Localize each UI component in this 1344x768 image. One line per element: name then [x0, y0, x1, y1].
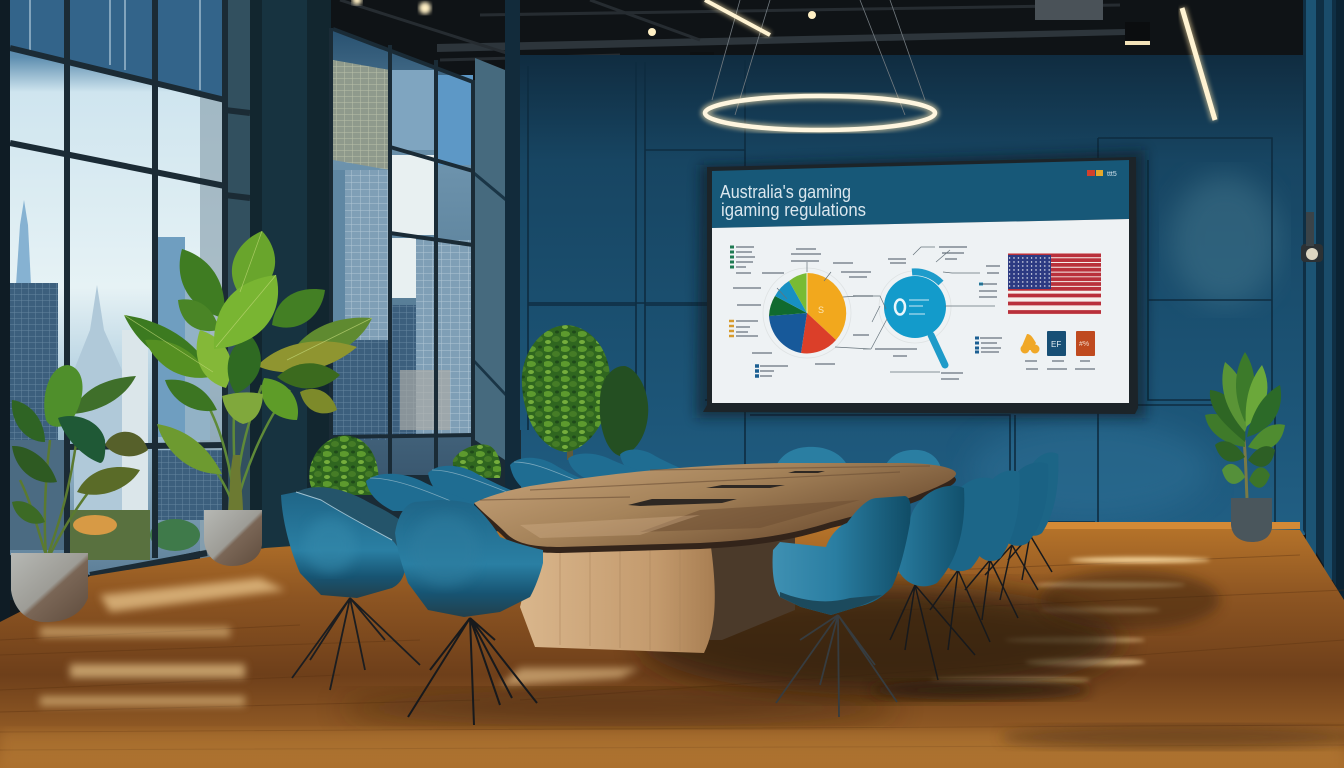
pot: left plant — [11, 553, 88, 622]
wall — [505, 55, 1305, 535]
screen logo — [1087, 170, 1117, 178]
far side chairs — [777, 447, 941, 468]
right row chair 2 — [890, 486, 975, 680]
screen body — [712, 219, 1129, 403]
left chair behind — [297, 487, 403, 560]
icon: navy tile: EF — [1051, 340, 1061, 349]
light fixtures — [352, 0, 1215, 130]
bezel — [703, 157, 1138, 414]
left window — [0, 0, 262, 665]
shrub right — [453, 444, 501, 478]
pie chart — [763, 268, 851, 358]
ceiling — [0, 0, 1344, 110]
right row chair 6 — [1008, 452, 1058, 580]
right window — [331, 0, 521, 540]
table base — [520, 525, 795, 653]
behind-chair highlights — [370, 462, 590, 507]
pie chart: S — [818, 305, 824, 315]
right row chair 4 — [965, 471, 1020, 620]
pot: right plant — [1231, 498, 1272, 542]
magnifier icon — [879, 271, 951, 365]
icon: orange tile — [1076, 331, 1095, 356]
floor — [0, 522, 1344, 768]
city skyline — [10, 200, 225, 560]
screen title — [720, 182, 866, 220]
pot: large plant — [204, 510, 262, 566]
legend squares — [729, 247, 983, 376]
right row chair 5 — [985, 462, 1048, 600]
right columns — [1301, 0, 1344, 600]
back row chairs, left side — [366, 450, 684, 511]
large plant — [124, 231, 372, 512]
screen logo: ttt5 — [1107, 171, 1117, 178]
right plant — [1205, 352, 1285, 498]
center front chair — [395, 500, 543, 725]
right front chair — [773, 496, 911, 717]
american flag — [1008, 253, 1101, 315]
left plant — [12, 365, 148, 555]
table cable ports — [628, 471, 825, 506]
icon: orange figure — [1020, 334, 1040, 354]
screen — [696, 150, 1146, 418]
pillar — [250, 0, 331, 548]
screen title: igaming regulations — [721, 200, 866, 220]
icon: orange tile: #% — [1079, 341, 1089, 348]
right row chair 3 — [930, 478, 995, 650]
shrub left — [309, 436, 379, 495]
left front chair — [281, 492, 420, 690]
small chart labels — [733, 247, 1095, 379]
table top — [474, 463, 956, 553]
tree behind table — [522, 325, 648, 460]
screen header — [712, 160, 1129, 228]
icon: navy tile — [1047, 331, 1066, 356]
screen title: Australia's gaming — [720, 182, 851, 202]
